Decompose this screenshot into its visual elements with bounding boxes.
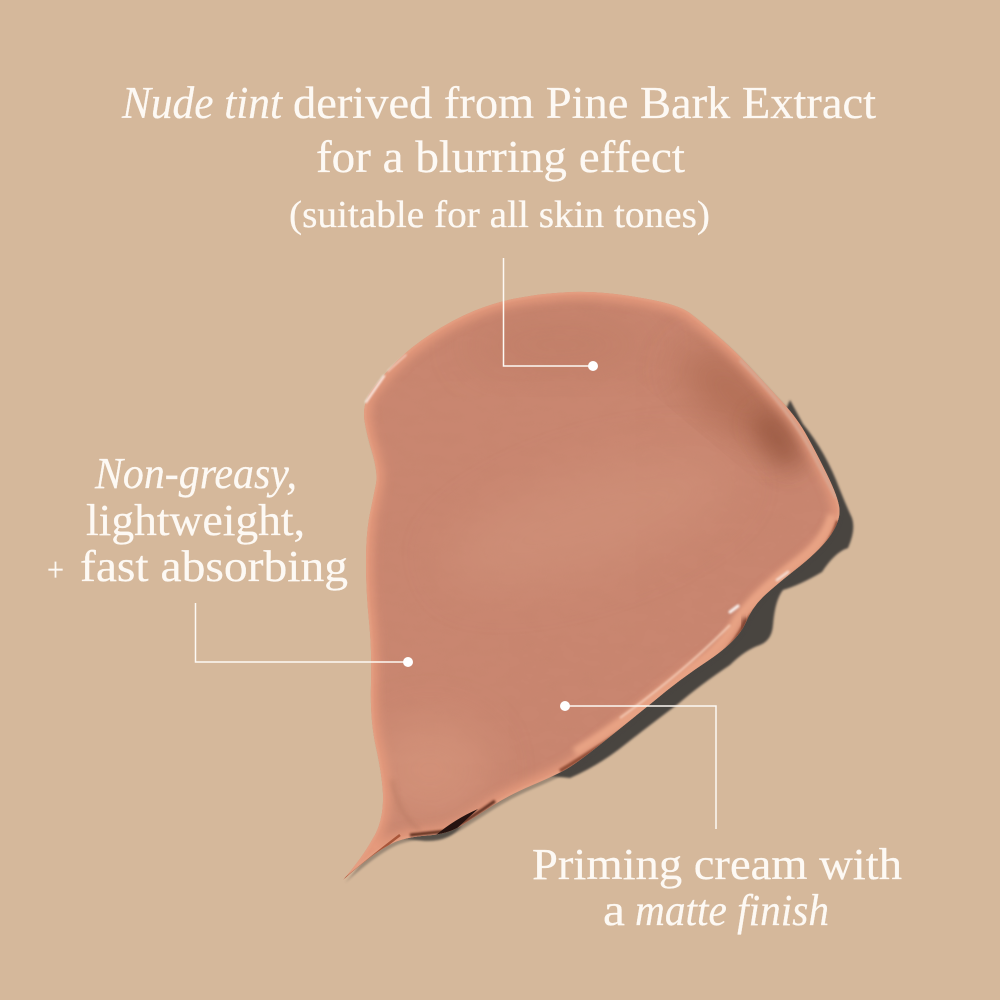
callout text: non-greasy [47,449,348,591]
swatch soft rim light [343,292,840,880]
callout text: priming cream: a [603,886,625,935]
swatch shading [340,280,860,890]
callout text: priming cream: matte finish [635,886,829,935]
leader: left callout [196,603,413,667]
leader: top callout [504,258,598,371]
swatch lower-left edge [410,801,495,835]
heading: nude tint [121,78,877,236]
heading: nude tint: Nude tint [121,78,283,128]
swatch body [343,292,840,880]
callout text: non-greasy: lightweight, [86,496,305,545]
swatch gloss highlights [366,355,788,612]
swatch cast shadow [345,295,853,883]
heading: nude tint: (suitable for all skin tones) [289,194,710,236]
callout text: priming cream [532,840,902,935]
swatch upper right rim [740,360,836,498]
heading: nude tint: derived from Pine Bark Extract [293,78,877,128]
heading: nude tint: for a blurring effect [316,132,686,182]
callout text: non-greasy: fast absorbing [80,542,348,591]
swatch lower rim [575,515,832,752]
callout text: priming cream: Priming cream with [532,840,902,889]
callout text: non-greasy: Non-greasy, [94,449,297,498]
leader: bottom callout [560,701,716,829]
callout text: non-greasy: + [47,552,64,589]
cream swatch [340,280,860,890]
